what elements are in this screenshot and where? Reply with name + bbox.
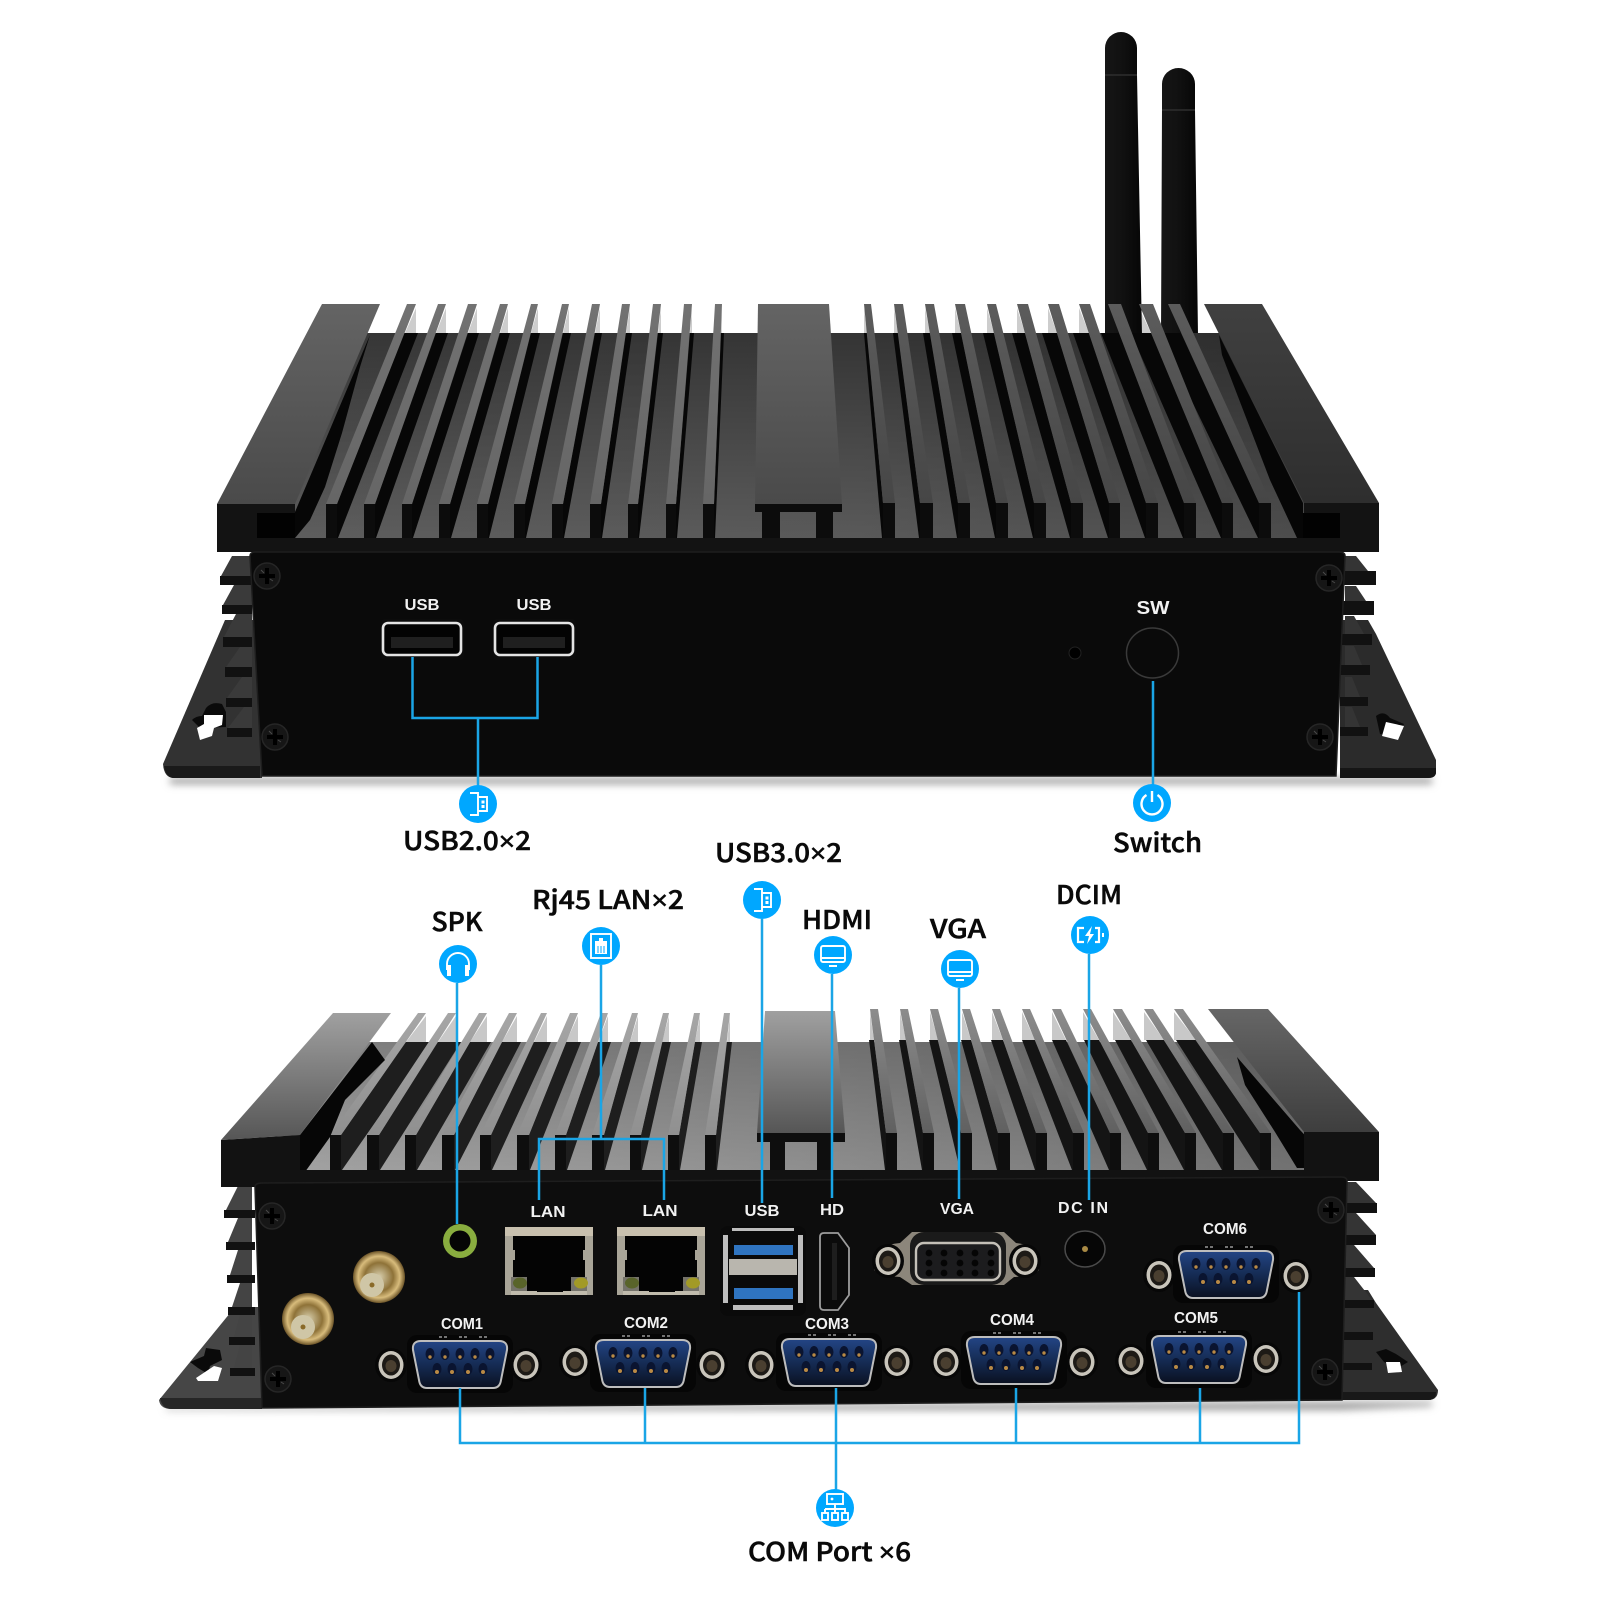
body band and rail fronts [217, 503, 1379, 556]
rear panel silk labels: DC IN [1058, 1200, 1108, 1217]
rear panel silk labels [441, 1200, 1247, 1333]
right mounting flange [1340, 620, 1436, 778]
center rail [755, 304, 842, 504]
rear panel silk labels: VGA [940, 1201, 974, 1218]
rear panel silk labels: LAN [642, 1203, 678, 1220]
rear panel silk labels: LAN [530, 1204, 566, 1221]
callout: SPK [432, 902, 483, 1224]
callout: DCIM: DCIM [1056, 875, 1122, 912]
fin front faces [330, 1133, 1271, 1170]
power button [1126, 628, 1178, 678]
heatsink deck [255, 1042, 1335, 1172]
fin shadows [341, 1042, 732, 1170]
rear panel [255, 1177, 1347, 1408]
HDMI port [820, 1233, 849, 1310]
COM6 port [1143, 1245, 1312, 1303]
panel screws [259, 1203, 285, 1229]
left mounting flange [163, 620, 262, 778]
fin shadows [337, 333, 724, 538]
right fins [870, 1009, 1271, 1133]
side teeth right [1342, 1182, 1377, 1370]
side teeth right [1340, 556, 1376, 736]
left fins [326, 304, 722, 504]
right rail [1204, 304, 1379, 503]
rear panel silk labels: COM4 [990, 1312, 1034, 1329]
callout: USB2.0×2 [403, 657, 538, 858]
callout: SPK: SPK [432, 902, 483, 939]
callout: USB2.0×2: USB2.0×2 [403, 821, 531, 858]
side teeth left [224, 1186, 255, 1376]
rear panel silk labels: COM6 [1203, 1221, 1247, 1238]
VGA port [872, 1232, 1041, 1285]
rear panel silk labels: USB [744, 1203, 780, 1220]
USB 2.0 ports [381, 619, 464, 660]
left rail [221, 1013, 391, 1140]
callout: Rj45 LAN×2 [532, 880, 684, 1200]
SMA antenna connector 1 [353, 1251, 405, 1303]
rear panel silk labels: COM1 [441, 1316, 483, 1333]
SW silk label: SW [1136, 598, 1170, 618]
USB silk labels: USB [404, 597, 440, 614]
SMA antenna connector 2 [282, 1293, 334, 1345]
left fins [330, 1013, 730, 1135]
callout: HDMI [802, 900, 872, 1198]
COM3 port [745, 1333, 913, 1391]
side teeth left [220, 556, 252, 737]
COM5 port [1115, 1330, 1282, 1388]
device: top view, front panel side [163, 304, 1436, 784]
icon: antenna pair [1105, 32, 1198, 336]
drop shadow [166, 1402, 1432, 1410]
COM2 port [559, 1334, 728, 1392]
bottom device fin back highlights [406, 1012, 1196, 1042]
LAN port 1 [501, 1225, 597, 1301]
callout: Switch [1113, 681, 1202, 860]
right fins [864, 304, 1271, 503]
callout: DCIM [1056, 875, 1122, 1200]
heatsink deck [270, 333, 1330, 540]
left rail [217, 304, 380, 504]
rail shadows [264, 1042, 1336, 1172]
left mounting flange [159, 1307, 262, 1409]
rear panel silk labels: COM3 [805, 1316, 849, 1333]
rear panel silk labels: HD [820, 1202, 844, 1219]
panel screws [254, 563, 280, 589]
callout: VGA [929, 909, 987, 1199]
drop shadow [170, 778, 1432, 784]
callout: HDMI: HDMI [802, 900, 872, 937]
right mounting flange [1342, 1290, 1438, 1400]
callout: USB3.0×2: USB3.0×2 [715, 833, 842, 870]
rail shadows [295, 335, 1303, 538]
callout: Switch: Switch [1113, 823, 1202, 860]
callout: VGA: VGA [929, 909, 987, 946]
DC power jack [1065, 1231, 1105, 1267]
top device fin back highlights [405, 308, 1181, 333]
device: bottom view, rear panel side [159, 1009, 1438, 1410]
rear panel silk labels: COM5 [1174, 1310, 1218, 1327]
COM4 port [930, 1331, 1098, 1389]
callout: COM Port ×6 [460, 1292, 1299, 1569]
fin front faces [326, 503, 1271, 538]
callout: USB3.0×2 [715, 833, 842, 1203]
callout: COM Port ×6: COM Port ×6 [748, 1532, 911, 1569]
callout: Rj45 LAN×2: Rj45 LAN ×2 [532, 880, 684, 917]
rear panel silk labels: COM2 [624, 1315, 668, 1332]
indicator hole [1069, 647, 1081, 659]
front panel [250, 552, 1345, 776]
right rail [1208, 1009, 1379, 1132]
body band and rail fronts [221, 1132, 1379, 1187]
device: top view, front panel side: USB [516, 597, 552, 614]
LAN port 2 [613, 1225, 709, 1301]
COM1 port [375, 1335, 542, 1393]
center rail [757, 1011, 845, 1133]
audio jack [443, 1224, 477, 1258]
USB 3.0 stacked ports [720, 1226, 806, 1316]
